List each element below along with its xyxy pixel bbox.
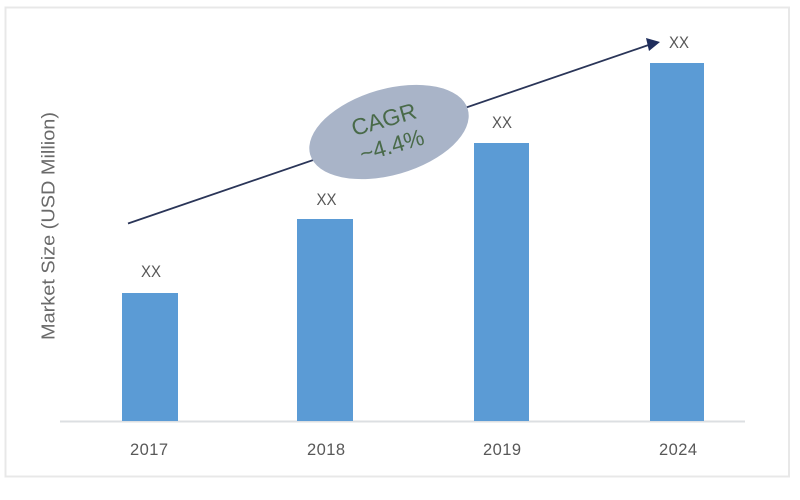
bar: 2019 [474,143,529,421]
arrow: growth trend [128,38,660,224]
value label: 2017: XX [141,262,161,281]
year label: 2017: 2017 [130,441,168,459]
callout text: ~4.4% [357,124,427,167]
bar: 2017 [122,293,178,421]
callout text: CAGR [348,98,419,141]
bar: 2024 [650,63,704,421]
value label: 2018: XX [316,190,336,209]
year label: 2024: 2024 [659,441,697,459]
callout: CAGR ellipse [298,68,480,196]
value label: 2019: XX [492,113,512,132]
year label: 2018: 2018 [307,441,345,459]
bar: 2018 [297,219,353,421]
callout text [348,98,427,167]
y-axis title: Market Size (USD Million) [38,112,58,340]
value label: 2024: XX [669,33,689,52]
year label: 2019: 2019 [483,441,521,459]
